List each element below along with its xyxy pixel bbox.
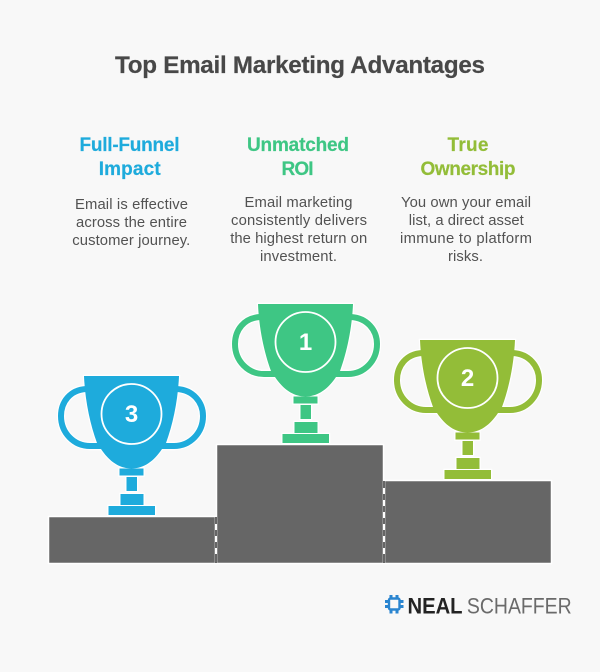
podium platforms: [48, 444, 552, 564]
icon: trophy third place: 3: [125, 401, 138, 428]
text block: full-funnel description: customer journey.: [72, 233, 190, 249]
platform: second place: [384, 480, 552, 564]
platform: first place: [216, 444, 384, 564]
icon: trophy second place: [397, 340, 539, 479]
text block: unmatched roi description: investment.: [260, 249, 337, 265]
platform: third place: [48, 516, 216, 564]
logo: Neal Schaffer: [385, 593, 572, 619]
text block: full-funnel description: [72, 197, 190, 249]
text block: true ownership description: You own your email: [401, 195, 531, 211]
text block: full-funnel description: across the entire: [76, 215, 187, 231]
text block: true ownership description: immune to platform: [400, 231, 532, 247]
heading: unmatched roi: Unmatched: [247, 135, 349, 156]
panel: unmatched roi text: [230, 135, 367, 265]
panel: true ownership text: [400, 135, 532, 265]
heading: full-funnel impact: [80, 135, 180, 180]
text block: unmatched roi description: consistently delivers: [231, 213, 367, 229]
text block: unmatched roi description: [230, 195, 367, 265]
heading: unmatched roi: [247, 135, 349, 180]
icon: trophy first place: [235, 304, 377, 443]
icon: trophy third place: [61, 376, 203, 515]
heading: full-funnel impact: Impact: [99, 159, 161, 180]
wordmark: NEAL: [407, 593, 463, 619]
text block: full-funnel description: Email is effective: [75, 197, 188, 213]
wordmark: [407, 593, 572, 619]
text block: unmatched roi description: Email marketing: [244, 195, 352, 211]
title: Top Email Marketing Advantages: [115, 52, 485, 79]
panel: full-funnel impact text: [72, 135, 190, 249]
heading: true ownership: [420, 135, 516, 180]
icon: trophy first place: 1: [299, 329, 312, 356]
wordmark: SCHAFFER: [467, 594, 572, 619]
text block: true ownership description: [400, 195, 532, 265]
heading: full-funnel impact: Full-Funnel: [80, 135, 180, 156]
heading: unmatched roi: ROI: [282, 159, 314, 180]
text block: true ownership description: list, a direct asset: [409, 213, 524, 229]
heading: true ownership: Ownership: [420, 159, 516, 180]
icon: trophy second place: 2: [461, 365, 474, 392]
icon: chip logo mark: [385, 595, 404, 614]
text block: unmatched roi description: the highest return on: [230, 231, 367, 247]
text block: true ownership description: risks.: [448, 249, 483, 265]
heading: true ownership: True: [448, 135, 488, 156]
